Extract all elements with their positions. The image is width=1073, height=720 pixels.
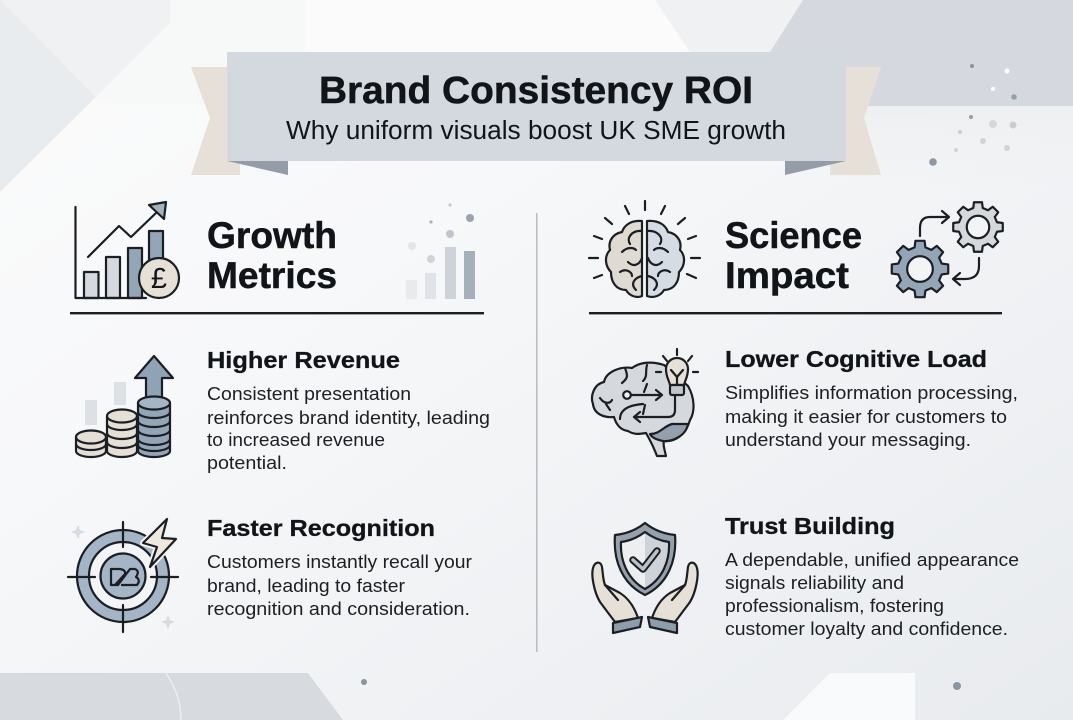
text: faster recognition description: [207, 551, 472, 619]
heading: faster recognition: Faster Recognition: [207, 515, 435, 541]
text: lower cognitive load description: understand your messaging.: [725, 429, 971, 450]
text: lower cognitive load description: Simplifies information processing,: [725, 382, 1018, 403]
icon: target with lightning bolt: [68, 519, 178, 632]
heading: trust building: Trust Building: [725, 513, 895, 539]
icon: growth chart with pound coin: £: [151, 263, 167, 295]
text: higher revenue description: to increased revenue: [207, 429, 385, 450]
panel: growth metrics: [70, 202, 484, 314]
heading: growth metrics: Metrics: [207, 255, 337, 296]
text: lower cognitive load description: making it easier for customers to: [725, 406, 1007, 427]
icon: growth chart with pound coin: [76, 202, 179, 298]
icon: gears with arrows: [892, 202, 1003, 297]
heading: higher revenue: Higher Revenue: [207, 347, 400, 373]
item: higher revenue: [76, 347, 490, 473]
heading: science impact: Impact: [725, 255, 849, 296]
text: lower cognitive load description: [725, 382, 1018, 450]
icon: glowing brain: [589, 201, 700, 297]
heading: science impact: Science: [725, 215, 862, 256]
panel: science impact: [589, 201, 1003, 314]
title: Brand Consistency ROI: [319, 70, 753, 112]
icon: coin stacks with arrow: [76, 356, 173, 457]
heading: lower cognitive load: Lower Cognitive Load: [725, 346, 987, 372]
text: trust building description: customer loyalty and confidence.: [725, 618, 1008, 639]
title banner: [191, 52, 881, 175]
text: faster recognition description: brand, leading to faster: [207, 575, 405, 596]
text: trust building description: professionalism, fostering: [725, 595, 944, 616]
item: trust building: [592, 513, 1019, 639]
subtitle: Why uniform visuals boost UK SME growth: [286, 117, 786, 145]
text: higher revenue description: reinforces brand identity, leading: [207, 407, 490, 428]
text: trust building description: [725, 549, 1019, 639]
heading: growth metrics: Growth: [207, 215, 337, 256]
text: higher revenue description: potential.: [207, 452, 287, 473]
text: trust building description: A dependable, unified appearance: [725, 549, 1019, 570]
icon: shield held by hands: [592, 523, 698, 633]
heading: science impact: [725, 215, 862, 296]
watermark bar chart: [406, 203, 475, 299]
text: trust building description: signals reliability and: [725, 572, 904, 593]
divider: [536, 213, 538, 652]
item: faster recognition: [68, 515, 472, 632]
text: faster recognition description: recognition and consideration.: [207, 598, 470, 619]
text: higher revenue description: [207, 383, 490, 473]
text: faster recognition description: Customers instantly recall your: [207, 551, 472, 572]
heading: growth metrics: [207, 215, 337, 296]
icon: brain with lightbulb: [592, 349, 698, 456]
text: higher revenue description: Consistent presentation: [207, 383, 411, 404]
item: lower cognitive load: [592, 346, 1018, 456]
